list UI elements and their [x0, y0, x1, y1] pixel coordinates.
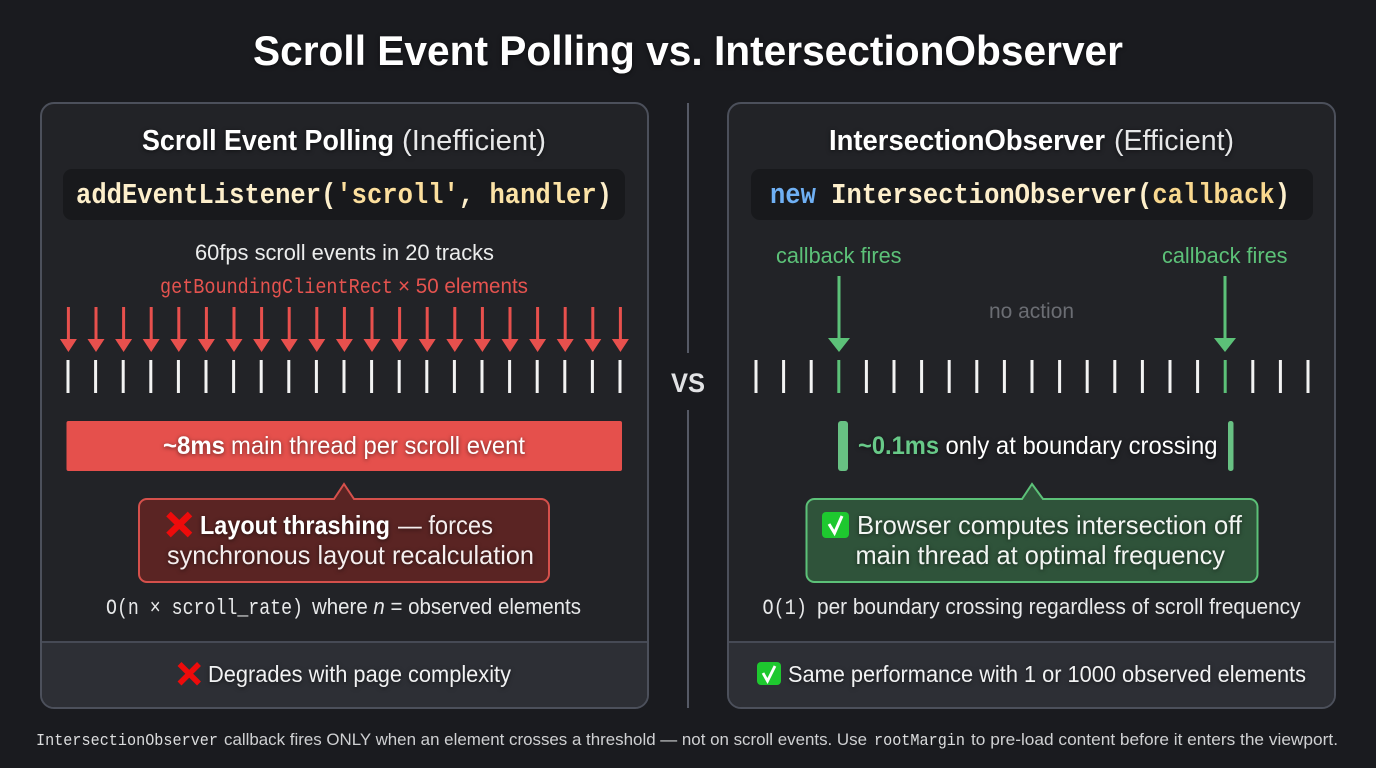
callout: layout thrashing — [139, 484, 549, 582]
complexity note: O(n × scroll_rate) — [106, 596, 303, 621]
text: getBoundingClientRect count: × 50 elements — [398, 275, 528, 298]
cost marker: 0.1ms at boundary — [838, 421, 1234, 471]
cost bar: 8ms main thread: main thread per scroll event — [231, 432, 525, 460]
footer: same performance: Same performance with 1 or 1000 observed elements — [788, 661, 1306, 687]
panel heading: intersection observer: IntersectionObserver — [829, 125, 1105, 157]
code snippet: new IntersectionObserver — [751, 169, 1313, 220]
callout text: synchronous layout recalculation — [167, 540, 534, 570]
code snippet: addEventListener — [63, 169, 625, 220]
arrow: callback left — [828, 276, 850, 352]
complexity note — [106, 594, 581, 621]
arrow: callback right — [1214, 276, 1236, 352]
title: Scroll Event Polling vs. IntersectionObserver — [253, 27, 1123, 74]
center divider with VS: VS — [671, 368, 705, 398]
cost marker: 0.1ms at boundary: ~0.1ms — [858, 432, 939, 460]
code snippet: new IntersectionObserver: new IntersectionObserver(callback) — [770, 179, 1290, 212]
text: getBoundingClientRect count — [160, 275, 528, 300]
cost marker: 0.1ms at boundary: only at boundary crossing — [946, 432, 1218, 460]
cost bar: 8ms main thread — [66, 421, 622, 471]
cost bar: 8ms main thread: ~8ms — [163, 432, 225, 460]
panel heading: scroll event polling — [142, 125, 546, 157]
callout text: main thread at optimal frequency — [856, 540, 1225, 570]
callout text: Layout thrashing — [200, 510, 390, 540]
footnote — [36, 730, 1338, 751]
callout text: Browser computes intersection off — [857, 510, 1243, 540]
footer: degrades — [42, 642, 647, 707]
label: no action: no action — [989, 300, 1074, 323]
callout text — [167, 510, 534, 570]
text: 60fps scroll events: 60fps scroll events in 20 tracks — [195, 240, 494, 265]
callout: browser computes — [806, 484, 1258, 582]
panel: scroll event polling — [41, 103, 648, 708]
complexity note: where n = observed elements — [311, 594, 581, 619]
timeline ticks — [68, 360, 620, 393]
callout text — [856, 510, 1243, 570]
panel: intersection observer — [728, 103, 1335, 708]
complexity note: per boundary crossing regardless of scroll frequency — [817, 594, 1300, 619]
footnote: IntersectionObserver — [36, 732, 218, 751]
label: callback fires left: callback fires — [776, 243, 902, 268]
icon: red cross — [180, 664, 199, 684]
code snippet: addEventListener: addEventListener('scroll', handler) — [76, 179, 612, 212]
footnote: callback fires ONLY when an element crosses a threshold — not on scroll events. Use — [224, 730, 867, 749]
footer: degrades: Degrades with page complexity — [208, 661, 511, 687]
panel heading: scroll event polling: (Inefficient) — [402, 125, 546, 157]
callout text: — forces — [398, 510, 493, 540]
panel heading: scroll event polling: Scroll Event Polling — [142, 125, 394, 157]
icon: red cross — [168, 514, 190, 535]
label: callback fires right: callback fires — [1162, 243, 1288, 268]
timeline ticks — [756, 360, 1308, 393]
footnote: to pre-load content before it enters the viewport. — [971, 730, 1338, 749]
footnote: rootMargin — [874, 732, 965, 751]
icon: green check — [757, 662, 781, 685]
icon: green check — [822, 512, 849, 538]
panel heading: intersection observer: (Efficient) — [1114, 125, 1234, 157]
complexity note: O(1) — [762, 596, 807, 621]
footer: same performance — [729, 642, 1334, 707]
icon: red event arrows — [60, 307, 629, 352]
text: getBoundingClientRect count: getBoundingClientRect — [160, 277, 393, 300]
